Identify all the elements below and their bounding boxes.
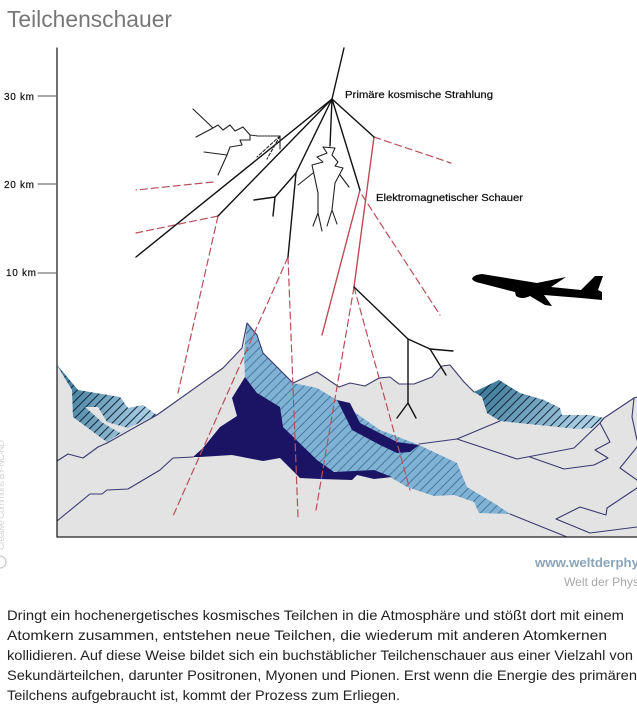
axis label 30 km: 30 km	[4, 92, 34, 103]
body text	[7, 607, 637, 703]
red dashed particle tracks	[136, 137, 451, 517]
body text: Dringt ein hochenergetisches kosmisches Teilchen in die Atmosphäre und stößt dort mit einem	[7, 607, 624, 623]
right glacier	[474, 380, 604, 429]
body text: kollidieren. Auf diese Weise bildet sich ein buchstäblicher Teilchenschauer aus einer Vielzahl von	[7, 647, 633, 663]
source url: www.weltderphy	[534, 555, 637, 570]
title: Teilchenschauer	[7, 6, 172, 32]
y axis and baseline	[38, 48, 637, 537]
central zigzag shower	[298, 147, 349, 231]
dark rock upper	[337, 400, 419, 453]
ridge lines	[57, 323, 637, 537]
central hatched glacier	[244, 323, 510, 514]
body text: Atomkern zusammen, entstehen neue Teilchen, die wiederum mit anderen Atomkernen	[7, 627, 607, 643]
body text: Teilchens aufgebraucht ist, kommt der Prozess zum Erliegen.	[7, 687, 400, 703]
red solid particle tracks	[322, 137, 374, 335]
dark rock main	[193, 377, 392, 480]
label: electromagnetic shower: Elektromagnetischer Schauer	[376, 192, 524, 204]
mountain silhouette	[57, 323, 637, 537]
axis label 10 km: 10 km	[6, 268, 36, 279]
black shower tracks	[136, 48, 453, 418]
body text: Sekundärteilchen, darunter Positronen, Myonen und Pionen. Erst wenn die Energie des primären	[7, 667, 637, 683]
left glacier	[57, 365, 157, 442]
axis label 20 km: 20 km	[4, 180, 34, 191]
left zigzag shower	[193, 109, 280, 175]
mountain panorama	[57, 323, 637, 537]
icon: airplane	[472, 274, 603, 306]
source name: Welt der Phys	[564, 575, 637, 589]
label: primary radiation: Primäre kosmische Strahlung	[345, 89, 493, 101]
